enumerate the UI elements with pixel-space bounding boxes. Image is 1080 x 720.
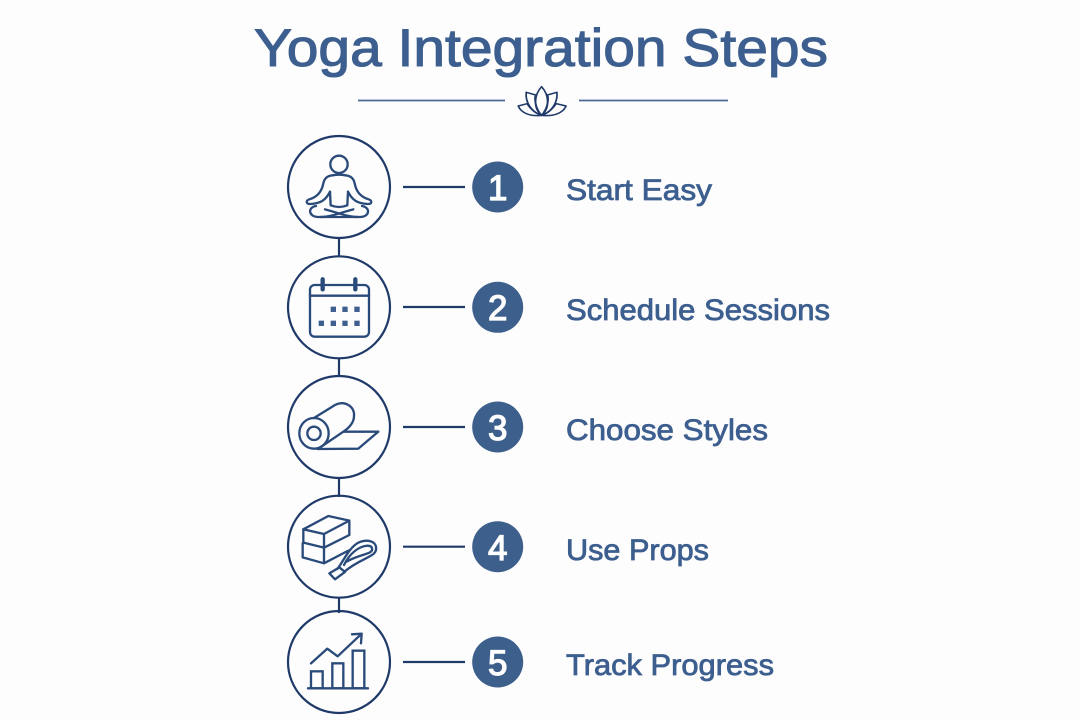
- icon: rolled mat: [299, 403, 378, 449]
- icon: lotus: [518, 87, 566, 116]
- icon: rising bar chart: [308, 634, 368, 688]
- icon circle 4: [288, 496, 390, 598]
- title divider with lotus: [358, 87, 728, 116]
- step 4: use props: [288, 496, 709, 598]
- label 1: Start Easy: [566, 174, 712, 207]
- label 3: Choose Styles: [566, 414, 768, 447]
- icon circle 3: [288, 376, 390, 478]
- label 4: Use Props: [566, 534, 709, 567]
- step 3: choose styles: [288, 376, 768, 478]
- number badge 2: [472, 282, 523, 333]
- icon circle 2: [288, 256, 390, 358]
- number 5: 5: [488, 644, 507, 683]
- number badge 4: [472, 521, 523, 572]
- number badge 1: [472, 162, 523, 212]
- label 5: Track Progress: [566, 649, 774, 682]
- connector 2: [403, 306, 465, 308]
- number 1: 1: [488, 169, 507, 208]
- icon: calendar: [310, 278, 369, 337]
- connector 1: [403, 186, 465, 188]
- connector 3: [403, 426, 465, 428]
- connector lines between steps: [338, 238, 340, 613]
- connector 5: [403, 661, 465, 663]
- number 3: 3: [488, 409, 507, 448]
- icon: blocks and strap: [303, 516, 376, 579]
- label 2: Schedule Sessions: [566, 294, 830, 327]
- connector 4: [403, 546, 465, 548]
- number 2: 2: [488, 289, 507, 328]
- icon circle 1: [288, 136, 390, 238]
- step 2: schedule sessions: [288, 256, 830, 358]
- step 5: track progress: [288, 611, 774, 713]
- title: Yoga Integration Steps: [254, 19, 828, 78]
- number badge 3: [472, 402, 523, 452]
- number badge 5: [472, 636, 523, 688]
- icon circle 5: [288, 611, 390, 713]
- icon: meditating person: [307, 156, 371, 217]
- number 4: 4: [488, 529, 507, 568]
- step 1: start easy: [288, 136, 712, 238]
